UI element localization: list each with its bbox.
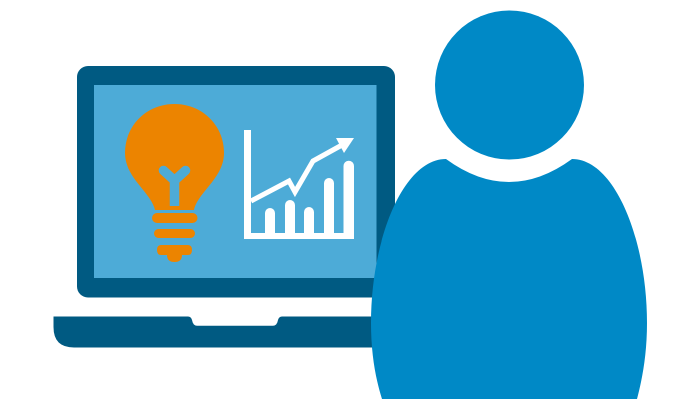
trend arrowhead <box>336 138 354 153</box>
chart bar 4 <box>324 178 334 233</box>
chart bar 2 <box>285 200 295 233</box>
chart axes <box>244 130 354 239</box>
laptop screen <box>94 85 376 278</box>
bulb glass <box>125 104 224 210</box>
bulb screw band <box>154 229 195 238</box>
bulb collar <box>152 213 198 223</box>
person <box>371 10 647 399</box>
laptop <box>54 66 400 348</box>
trend line <box>251 145 342 201</box>
chart bar 3 <box>304 207 314 233</box>
laptop lid <box>77 66 395 298</box>
chart bar 1 <box>265 208 275 233</box>
bulb base <box>157 245 192 262</box>
person body <box>371 159 647 399</box>
laptop base <box>54 316 400 348</box>
person head <box>435 10 584 160</box>
chart bar 5 <box>344 161 354 233</box>
icon: growth chart <box>244 130 354 239</box>
bulb filament <box>164 170 186 206</box>
icon: light bulb <box>125 104 224 262</box>
